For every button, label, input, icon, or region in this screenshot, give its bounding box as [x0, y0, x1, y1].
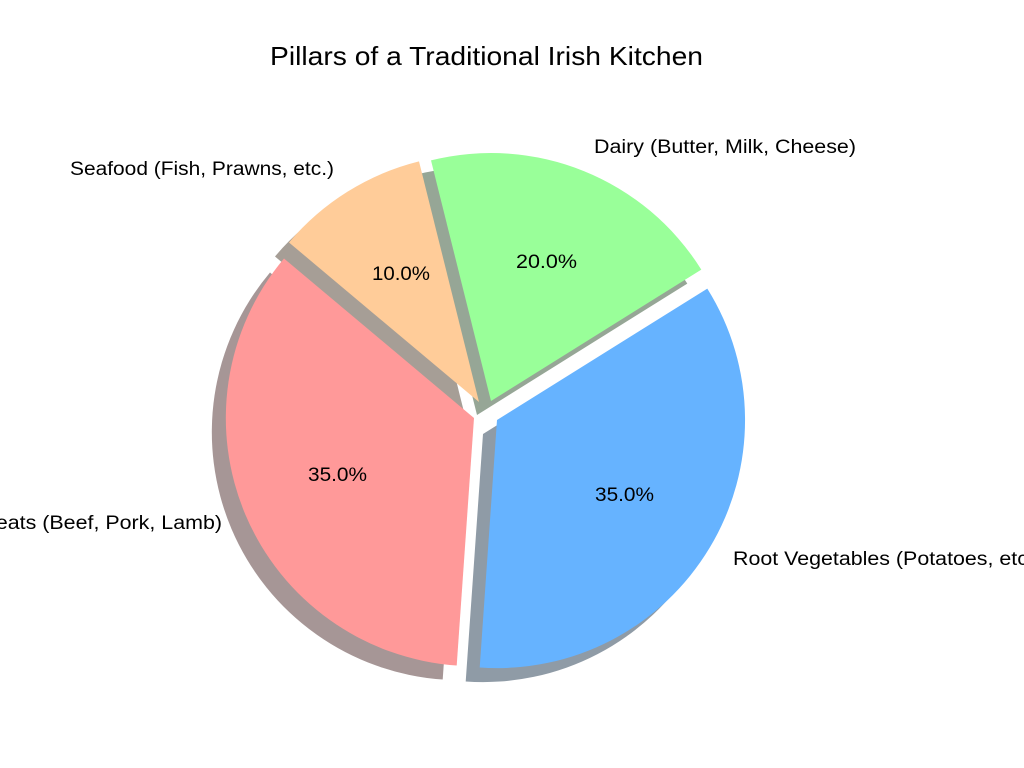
category labels: Root Vegetables (Potatoes, etc.) — [733, 549, 1024, 570]
percent labels — [308, 252, 654, 506]
category labels: Seafood (Fish, Prawns, etc.) — [70, 159, 334, 180]
wedge: meats — [226, 258, 474, 666]
title: Pillars of a Traditional Irish Kitchen — [270, 41, 703, 71]
wedge: seafood — [289, 161, 479, 402]
shadows — [212, 167, 731, 682]
percent labels: 35.0% — [308, 465, 367, 486]
wedge: root vegetables — [480, 289, 745, 668]
pie chart — [212, 153, 745, 682]
category labels: Dairy (Butter, Milk, Cheese) — [594, 137, 856, 158]
wedge: dairy — [431, 153, 701, 401]
percent labels: 35.0% — [595, 485, 654, 506]
percent labels: 20.0% — [516, 252, 577, 273]
percent labels: 10.0% — [372, 264, 430, 285]
category labels — [0, 137, 1024, 570]
